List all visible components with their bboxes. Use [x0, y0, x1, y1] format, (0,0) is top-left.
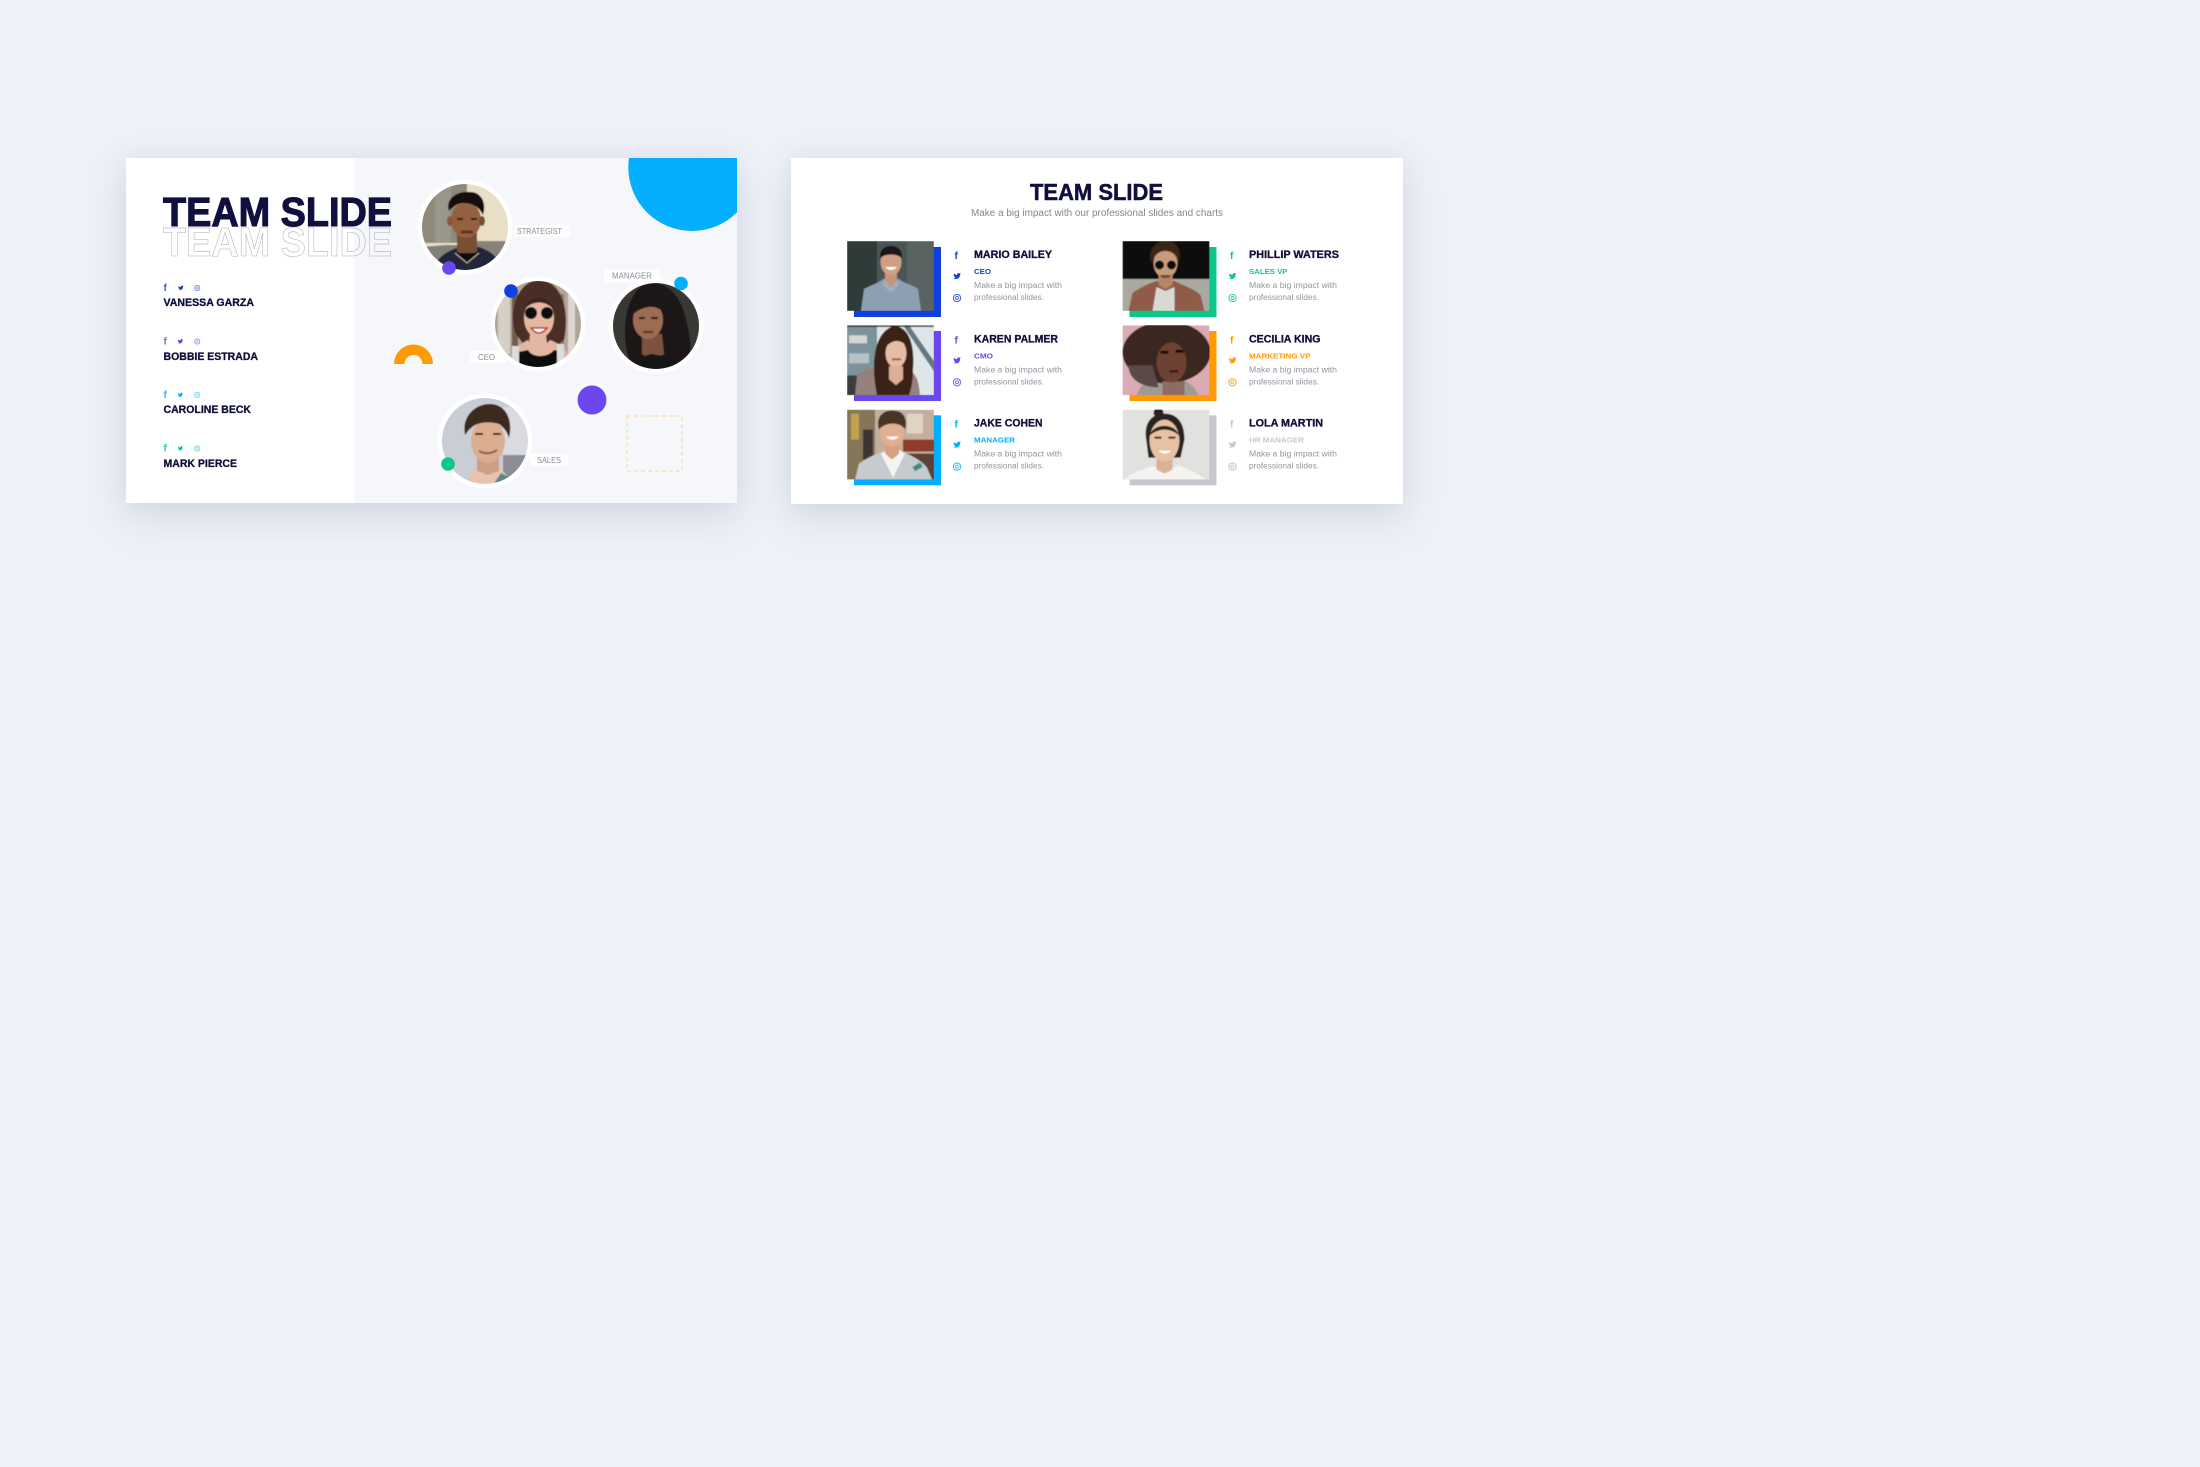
social icons — [1229, 420, 1236, 470]
name, role, description: HR MANAGER — [1249, 436, 1305, 445]
subtitle: Make a big impact with our professional slides and charts — [971, 208, 1223, 219]
portrait: sales man — [438, 394, 532, 488]
portrait: CEO woman in sunglasses — [490, 276, 586, 372]
profile: Cecilia King — [1122, 321, 1337, 401]
name, role, description — [974, 418, 1062, 471]
photo — [1122, 321, 1210, 395]
right tinted area — [354, 158, 737, 503]
decorative dashed square — [627, 416, 682, 471]
photo — [1122, 241, 1210, 311]
photo — [847, 410, 934, 480]
social icons — [953, 335, 961, 386]
name, role, description: Make a big impact with — [1249, 281, 1337, 290]
name, role, description: Make a big impact with — [1249, 450, 1337, 459]
colour offset block — [1130, 415, 1216, 485]
panel: right team slide with grid of profiles — [791, 158, 1403, 504]
name, role, description: KAREN PALMER — [974, 333, 1058, 345]
name, role, description: professional slides. — [1249, 377, 1319, 386]
social icons: f — [954, 251, 958, 262]
name, role, description — [974, 333, 1062, 386]
team list: Bobbie Estrada: BOBBIE ESTRADA — [164, 351, 258, 363]
team list: Vanessa Garza: f — [164, 283, 168, 294]
name, role, description: CEO — [974, 267, 991, 276]
social icons: f — [1230, 335, 1234, 346]
page background — [112, 153, 1417, 526]
social icons: f — [1230, 420, 1234, 431]
profile: Phillip Waters — [1122, 241, 1339, 317]
profile: Mario Bailey — [847, 241, 1062, 317]
name, role, description: MARIO BAILEY — [974, 249, 1053, 261]
name, role, description — [1249, 249, 1339, 302]
portrait: strategist man — [418, 180, 512, 274]
name, role, description: professional slides. — [974, 462, 1044, 471]
marker: cyan dot — [674, 277, 688, 290]
label: sales — [530, 454, 568, 466]
name, role, description: professional slides. — [974, 377, 1044, 386]
marker: green dot — [441, 457, 455, 471]
social icons: f — [954, 420, 958, 431]
team list: Caroline Beck: f — [164, 390, 168, 401]
label: manager: MANAGER — [612, 270, 652, 280]
social icons — [1229, 335, 1236, 386]
profile: Lola Martin — [1122, 408, 1337, 485]
name, role, description: MARKETING VP — [1249, 351, 1310, 360]
name, role, description: CECILIA KING — [1249, 333, 1320, 345]
team list: Caroline Beck: CAROLINE BECK — [164, 404, 251, 416]
social icons — [1229, 251, 1236, 302]
colour offset block — [854, 247, 941, 317]
name, role, description — [1249, 333, 1337, 386]
colour offset block — [854, 415, 941, 485]
portrait: manager woman — [608, 278, 704, 374]
decorative purple circle — [578, 386, 606, 414]
decorative cyan circle — [628, 104, 756, 231]
name, role, description: professional slides. — [974, 293, 1044, 302]
team list: Bobbie Estrada: f — [164, 336, 168, 348]
team list: Mark Pierce — [164, 444, 237, 470]
profile: Karen Palmer — [847, 325, 1062, 401]
name, role, description: Make a big impact with — [974, 450, 1062, 459]
label: strategist: STRATEGIST — [517, 226, 563, 236]
heading: team slide: TEAM SLIDE — [1030, 179, 1163, 205]
team list: Vanessa Garza — [164, 283, 254, 309]
marker: blue dot — [504, 284, 518, 298]
photo — [847, 325, 934, 395]
social icons — [953, 251, 961, 302]
name, role, description — [974, 249, 1062, 302]
team list: Caroline Beck — [164, 390, 251, 416]
name, role, description: PHILLIP WATERS — [1249, 249, 1339, 261]
social icons: f — [1230, 251, 1234, 262]
name, role, description: Make a big impact with — [974, 281, 1062, 290]
colour offset block — [1130, 247, 1216, 317]
photo — [847, 241, 934, 311]
colour offset block — [854, 331, 941, 401]
name, role, description: JAKE COHEN — [974, 418, 1043, 430]
heading: team slide: TEAM SLIDE — [163, 189, 392, 235]
label: sales: SALES — [537, 455, 561, 465]
label: manager — [604, 270, 660, 282]
name, role, description: MANAGER — [974, 436, 1016, 445]
heading: outlined team slide echo: TEAM SLIDE — [163, 219, 392, 265]
name, role, description: CMO — [974, 351, 993, 360]
profile: Jake Cohen — [847, 410, 1062, 485]
photo — [1122, 408, 1210, 480]
team list: Bobbie Estrada — [164, 336, 258, 363]
panel: left team slide with circular portraits — [126, 158, 737, 503]
social icons: f — [954, 335, 958, 346]
name, role, description: LOLA MARTIN — [1249, 418, 1323, 430]
marker: purple dot — [442, 261, 456, 275]
name, role, description — [1249, 418, 1337, 471]
social icons — [953, 420, 961, 470]
team list: Mark Pierce: f — [164, 444, 168, 454]
label: CEO — [470, 351, 506, 363]
name, role, description: professional slides. — [1249, 293, 1319, 302]
colour offset block — [1130, 331, 1216, 401]
name, role, description: Make a big impact with — [974, 365, 1062, 374]
team list: Mark Pierce: MARK PIERCE — [164, 458, 237, 470]
name, role, description: SALES VP — [1249, 267, 1288, 276]
name, role, description: Make a big impact with — [1249, 365, 1337, 374]
label: CEO: CEO — [478, 352, 495, 362]
team list: Vanessa Garza: VANESSA GARZA — [164, 297, 254, 309]
icon: orange arch — [394, 344, 433, 364]
name, role, description: professional slides. — [1249, 462, 1319, 471]
